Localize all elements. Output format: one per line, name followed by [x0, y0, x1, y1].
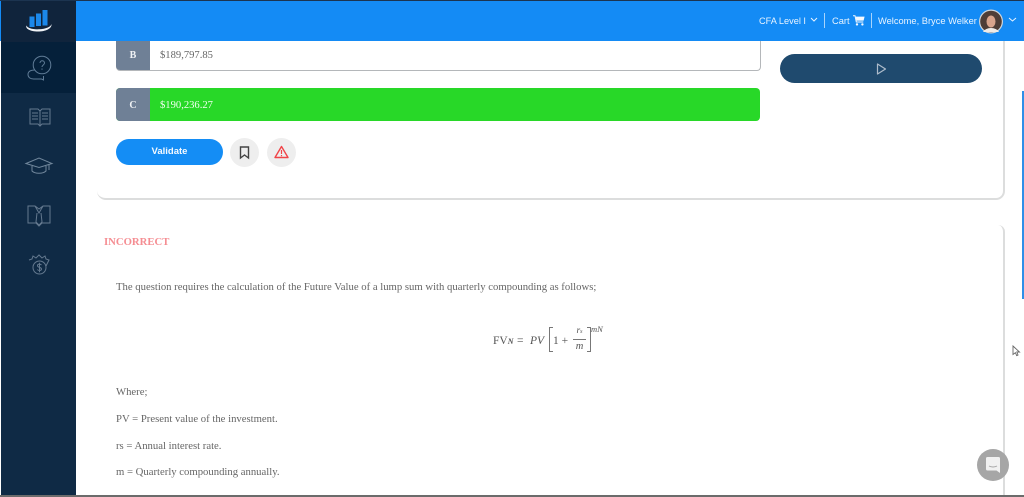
validate button — [116, 139, 223, 165]
validate button: Validate — [152, 146, 187, 157]
formula closing bracket — [587, 327, 591, 352]
option B letter — [116, 30, 150, 70]
icon: graduation cap — [24, 158, 54, 174]
option B value: $189,797.85 — [160, 50, 213, 61]
icon: open book — [30, 108, 50, 127]
status heading: INCORRECT — [104, 236, 169, 248]
where label: Where; — [116, 386, 147, 398]
icon: mouse cursor — [1012, 345, 1020, 356]
formula fraction — [573, 326, 586, 352]
cart link: Cart — [832, 16, 850, 26]
option C letter — [116, 88, 150, 121]
formula fraction: rs — [576, 326, 583, 336]
icon: warning triangle — [274, 146, 289, 158]
formula fraction: m — [576, 341, 583, 352]
formula left side: FVN — [493, 335, 513, 347]
bookmark button — [230, 138, 259, 167]
intro text: The question requires the calculation of the Future Value of a lump sum with quarterly compounding as follows; — [116, 281, 596, 293]
formula one plus: 1 + — [553, 335, 568, 347]
definition m: m = Quarterly compounding annually. — [116, 466, 280, 478]
panel: answer card — [97, 30, 1005, 200]
formula opening bracket — [549, 327, 553, 352]
sidebar — [1, 0, 76, 495]
option C — [116, 88, 760, 121]
icon: user chevron — [1008, 18, 1016, 22]
formula exponent: mN — [591, 324, 603, 334]
option C value: $190,236.27 — [160, 100, 213, 111]
formula — [493, 324, 604, 352]
level selector: CFA Level I — [759, 16, 806, 26]
icon: logo — [26, 10, 52, 32]
option B — [116, 30, 761, 71]
logo area — [1, 0, 76, 42]
header bar — [0, 0, 1024, 41]
icon: question bubbles — [28, 56, 52, 81]
icon: money hand — [28, 254, 50, 274]
option C letter: C — [129, 100, 137, 111]
chat button — [977, 449, 1009, 481]
panel: explanation — [97, 225, 1005, 497]
icon: chat bubble — [986, 457, 1000, 473]
option B letter: B — [130, 50, 136, 61]
icon: cart — [853, 15, 865, 26]
report button — [267, 138, 296, 167]
avatar — [979, 10, 1003, 34]
definition rs: rs = Annual interest rate. — [116, 440, 221, 452]
icon: bookmark — [240, 146, 250, 160]
icon: level chevron — [810, 18, 818, 22]
definition PV: PV = Present value of the investment. — [116, 413, 278, 425]
video button — [780, 54, 982, 83]
formula PV: PV — [530, 335, 544, 347]
scrollbar thumb — [1022, 91, 1024, 299]
active menu item — [1, 42, 76, 93]
icon: play — [876, 63, 886, 75]
formula equals: = — [517, 335, 524, 347]
welcome text: Welcome, Bryce Welker — [878, 16, 977, 26]
icon: book with tie — [28, 206, 50, 227]
